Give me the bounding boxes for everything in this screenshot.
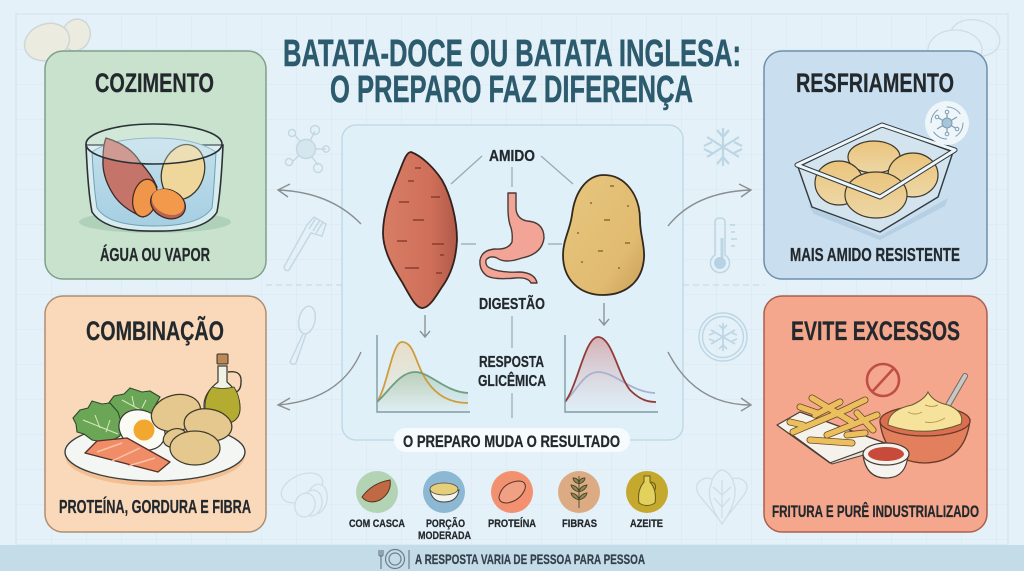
icon: sweet potato xyxy=(383,152,457,308)
caption: proteína, gordura e fibra: PROTEÍNA, GORDURA E FIBRA xyxy=(59,496,251,517)
caption: água ou vapor: ÁGUA OU VAPOR xyxy=(100,244,210,265)
icon: ketchup cup xyxy=(863,443,909,478)
title: O PREPARO FAZ DIFERENÇA xyxy=(330,69,693,111)
panel: evite excessos xyxy=(764,296,987,532)
panel: cozimento xyxy=(45,51,266,279)
label: amido: AMIDO xyxy=(489,148,535,165)
icon: potato xyxy=(563,175,644,295)
label: resposta glicêmica xyxy=(478,354,546,390)
icon: lettuce, bottom right xyxy=(697,470,747,524)
tip: com casca: COM CASCA xyxy=(349,518,405,530)
icon: glass bowl with potatoes xyxy=(79,124,231,233)
heading: combinação: COMBINAÇÃO xyxy=(86,315,224,346)
arrow: potato to chart xyxy=(599,303,609,325)
tip: azeite xyxy=(626,471,668,530)
footer bar xyxy=(0,545,1024,571)
arrow: sweet potato to chart xyxy=(420,315,430,337)
heading: evite excessos: EVITE EXCESSOS xyxy=(791,316,960,346)
panel: combinação xyxy=(45,296,266,532)
tip: proteína xyxy=(488,471,536,530)
tip: fibras: FIBRAS xyxy=(562,518,597,530)
label: digestão: DIGESTÃO xyxy=(479,293,545,313)
icon: potatoes outline, top right xyxy=(928,15,1003,70)
tip: azeite: AZEITE xyxy=(630,518,663,530)
panel: central comparison xyxy=(342,125,683,452)
icon: plate with salmon, egg, potatoes, olive oil xyxy=(65,354,245,486)
icon: thermometer xyxy=(710,218,737,273)
title xyxy=(283,33,741,111)
icon: prohibition sign xyxy=(867,364,899,396)
arrow: to avoid excesses xyxy=(668,352,751,411)
tip: proteína: PROTEÍNA xyxy=(488,517,536,530)
icon: plate with cutlery xyxy=(379,550,409,569)
label: resposta glicêmica: RESPOSTA xyxy=(479,354,544,371)
title: BATATA-DOCE OU BATATA INGLESA: xyxy=(283,33,741,75)
pill: o preparo muda o resultado: O PREPARO MUDA O RESULTADO xyxy=(403,432,620,451)
icon: potato with slices, bottom left xyxy=(277,467,329,519)
icon: bowl of mashed potatoes with spoon xyxy=(880,376,970,463)
icon: molecule xyxy=(285,126,329,172)
tip: porção moderada xyxy=(418,471,471,542)
arrow: to cooling xyxy=(668,184,751,226)
tip: porção moderada: PORÇÃO xyxy=(426,517,465,530)
icon: potato slices, top left xyxy=(19,15,95,67)
icon: spoon xyxy=(290,305,318,364)
arrow: to cooking xyxy=(278,184,361,224)
icon: resistant starch badge xyxy=(925,101,969,145)
heading: resfriamento: RESFRIAMENTO xyxy=(796,68,954,98)
connectors xyxy=(451,156,573,418)
icon: snowflake xyxy=(704,128,742,166)
panel: resfriamento xyxy=(764,51,987,279)
label: resposta glicêmica: GLICÊMICA xyxy=(478,371,546,390)
arrow: to combination xyxy=(278,352,361,410)
icon: snowflake in circle xyxy=(699,313,747,361)
icon: fork xyxy=(284,217,326,271)
chart: sweet potato glycemic curves xyxy=(377,335,470,412)
tip: porção moderada: MODERADA xyxy=(418,530,471,542)
icon: french fries tray xyxy=(777,398,885,464)
chart: potato glycemic curves xyxy=(565,335,658,412)
icon: stomach xyxy=(480,193,544,283)
tip: fibras xyxy=(558,471,600,530)
footer text: A RESPOSTA VARIA DE PESSOA PARA PESSOA xyxy=(415,551,645,567)
caption: mais amido resistente: MAIS AMIDO RESISTENTE xyxy=(790,245,960,265)
pill: o preparo muda o resultado xyxy=(394,428,630,452)
icon: container with potatoes xyxy=(797,125,955,240)
tip: com casca xyxy=(349,471,405,530)
heading: cozimento: COZIMENTO xyxy=(95,68,214,98)
